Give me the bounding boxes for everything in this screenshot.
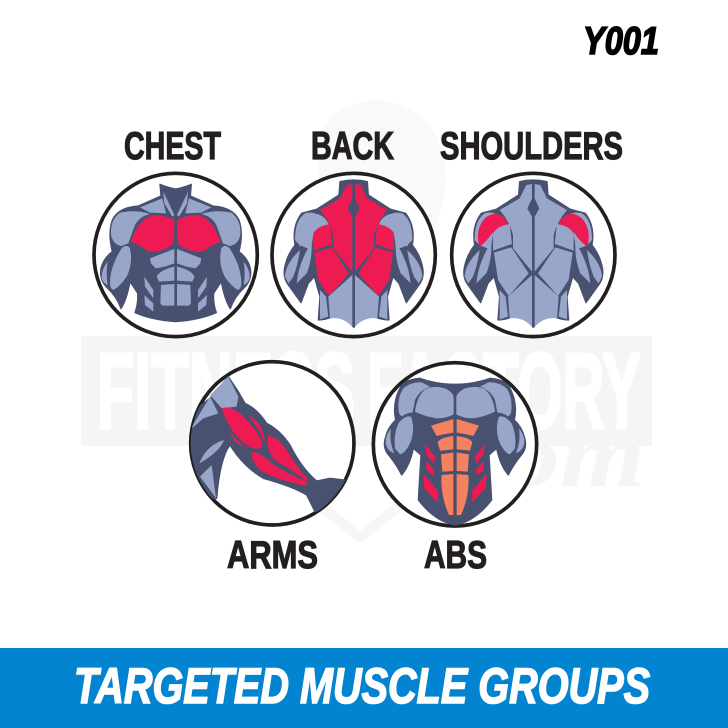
heading: back: BACK [311,125,394,168]
heading: chest: CHEST [124,125,221,168]
watermark: FITNESS [97,330,355,451]
heading: arms: ARMS [227,534,318,577]
watermark: om [505,404,645,506]
icon: abdominal muscles [373,363,537,526]
product code: Y001 [583,20,659,63]
watermark [81,100,652,537]
icon: shoulder muscles [452,173,615,337]
heading: abs: ABS [424,534,487,577]
icon: chest muscles [94,173,257,337]
heading: shoulders: SHOULDERS [440,125,623,168]
icon: back muscles [272,173,435,337]
banner [0,648,728,728]
icon: arm muscles [180,362,357,525]
